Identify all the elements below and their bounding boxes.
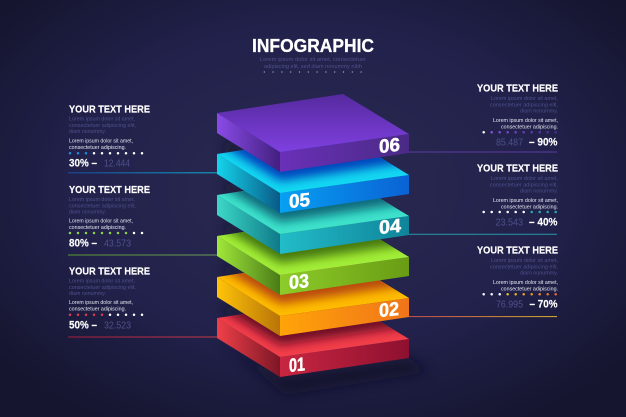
block 03 green: 03: [289, 271, 309, 294]
title dots: [264, 71, 362, 73]
panel: right 2: 23.543: [496, 216, 523, 228]
panel: left 2: consectetuer adipiscing.: [69, 225, 126, 231]
panel: left 3: diam nonummy.: [69, 291, 106, 297]
panel: right 1: 85.487: [496, 137, 523, 149]
panel: right 3: – 70%: [530, 299, 558, 311]
title: INFOGRAPHIC: [252, 36, 374, 56]
panel: right 1: YOUR TEXT HERE: [477, 83, 558, 95]
panel: left 3: consectetuer adipiscing.: [69, 306, 126, 312]
panel: left 3: [69, 266, 150, 332]
panel: left 1: [69, 104, 150, 170]
panel: left 2: consectetuer adipiscing elit,: [69, 204, 136, 210]
panel: left 2: Lorem ipsum dolor sit amet,: [69, 218, 133, 224]
panel: right 3: Lorem ipsum dolor sit amet,: [491, 258, 558, 264]
block 02 orange: 02: [379, 299, 399, 322]
panel: left 2: diam nonummy.: [69, 210, 106, 216]
panel: right 3: consectetuer adipiscing elit,: [490, 264, 558, 270]
panel: right 3: YOUR TEXT HERE: [477, 245, 558, 257]
panel: right 2: consectetuer adipiscing elit,: [490, 182, 558, 188]
connector lines: [68, 152, 557, 337]
panel: right 2: [477, 163, 558, 228]
panel: right 2: consectetuer adipiscing.: [501, 204, 558, 210]
block stack: [217, 94, 409, 377]
panel: left 2: 43.573: [104, 238, 131, 250]
panel: left 3: 32.523: [104, 320, 131, 332]
panel: left 3: Lorem ipsum dolor sit amet,: [69, 278, 135, 284]
panel: left 1: YOUR TEXT HERE: [69, 104, 150, 116]
block 06 purple: [217, 94, 409, 172]
block 02 orange: [217, 264, 409, 336]
panel: left 3: consectetuer adipiscing elit,: [69, 285, 136, 291]
panel: right 1: – 90%: [529, 137, 558, 149]
panel: right 3: [477, 245, 558, 311]
block 06 purple: 06: [379, 135, 400, 158]
panel: left 1: Lorem ipsum dolor sit amet,: [69, 116, 135, 122]
panel: left 2: 80% –: [69, 238, 97, 250]
subtitle: adipiscing elit, sed diam nonummy nibh: [264, 64, 362, 70]
panel: right 2: diam nonummy.: [520, 189, 558, 195]
panel: right 1: Lorem ipsum dolor sit amet,: [493, 118, 558, 124]
panel: right 3: Lorem ipsum dolor sit amet,: [493, 280, 558, 286]
panel: right 3: 76.995: [496, 299, 523, 311]
panel: left 2: YOUR TEXT HERE: [69, 184, 150, 196]
panel: right 2: Lorem ipsum dolor sit amet,: [493, 198, 558, 204]
block 03 green: [217, 224, 409, 295]
cast shadows on background: [217, 137, 430, 395]
panel: left 1: consectetuer adipiscing elit,: [69, 123, 136, 129]
panel: right 1: diam nonummy.: [520, 109, 558, 115]
panel: left 1: 30% –: [69, 158, 97, 170]
panel: right 1: Lorem ipsum dolor sit amet,: [491, 96, 558, 102]
block 04 teal: [217, 182, 409, 254]
panel: left 3: 50% –: [69, 320, 97, 332]
block 01 red: [217, 306, 409, 377]
panel: right 2: YOUR TEXT HERE: [477, 163, 558, 175]
panel: left 1: diam nonummy.: [69, 129, 106, 135]
panel: right 1: consectetuer adipiscing elit,: [490, 102, 558, 108]
title block: [252, 36, 374, 72]
panel: right 3: diam nonummy.: [520, 271, 558, 277]
panel: right 2: Lorem ipsum dolor sit amet,: [491, 176, 558, 182]
block 05 blue: 05: [289, 190, 310, 213]
panel: right 2: – 40%: [529, 216, 558, 228]
panel: left 2: Lorem ipsum dolor sit amet,: [69, 197, 135, 203]
block 04 teal: 04: [379, 216, 401, 239]
panel: left 3: YOUR TEXT HERE: [69, 266, 150, 278]
block 05 blue: [217, 142, 409, 213]
subtitle: Lorem ipsum dolor sit amet, consectetuer: [260, 57, 366, 63]
block 01 red: 01: [289, 354, 305, 377]
panel: left 1: 12.444: [104, 158, 130, 170]
panel: left 3: Lorem ipsum dolor sit amet,: [69, 300, 133, 306]
panel: left 2: [69, 184, 150, 250]
panel: right 1: consectetuer adipiscing.: [501, 124, 558, 130]
panel: right 1: [477, 83, 558, 149]
panel: left 1: consectetuer adipiscing.: [69, 145, 126, 151]
panel: left 1: Lorem ipsum dolor sit amet,: [69, 138, 133, 144]
panel: right 3: consectetuer adipiscing.: [501, 286, 558, 292]
subtitle: [260, 57, 366, 70]
